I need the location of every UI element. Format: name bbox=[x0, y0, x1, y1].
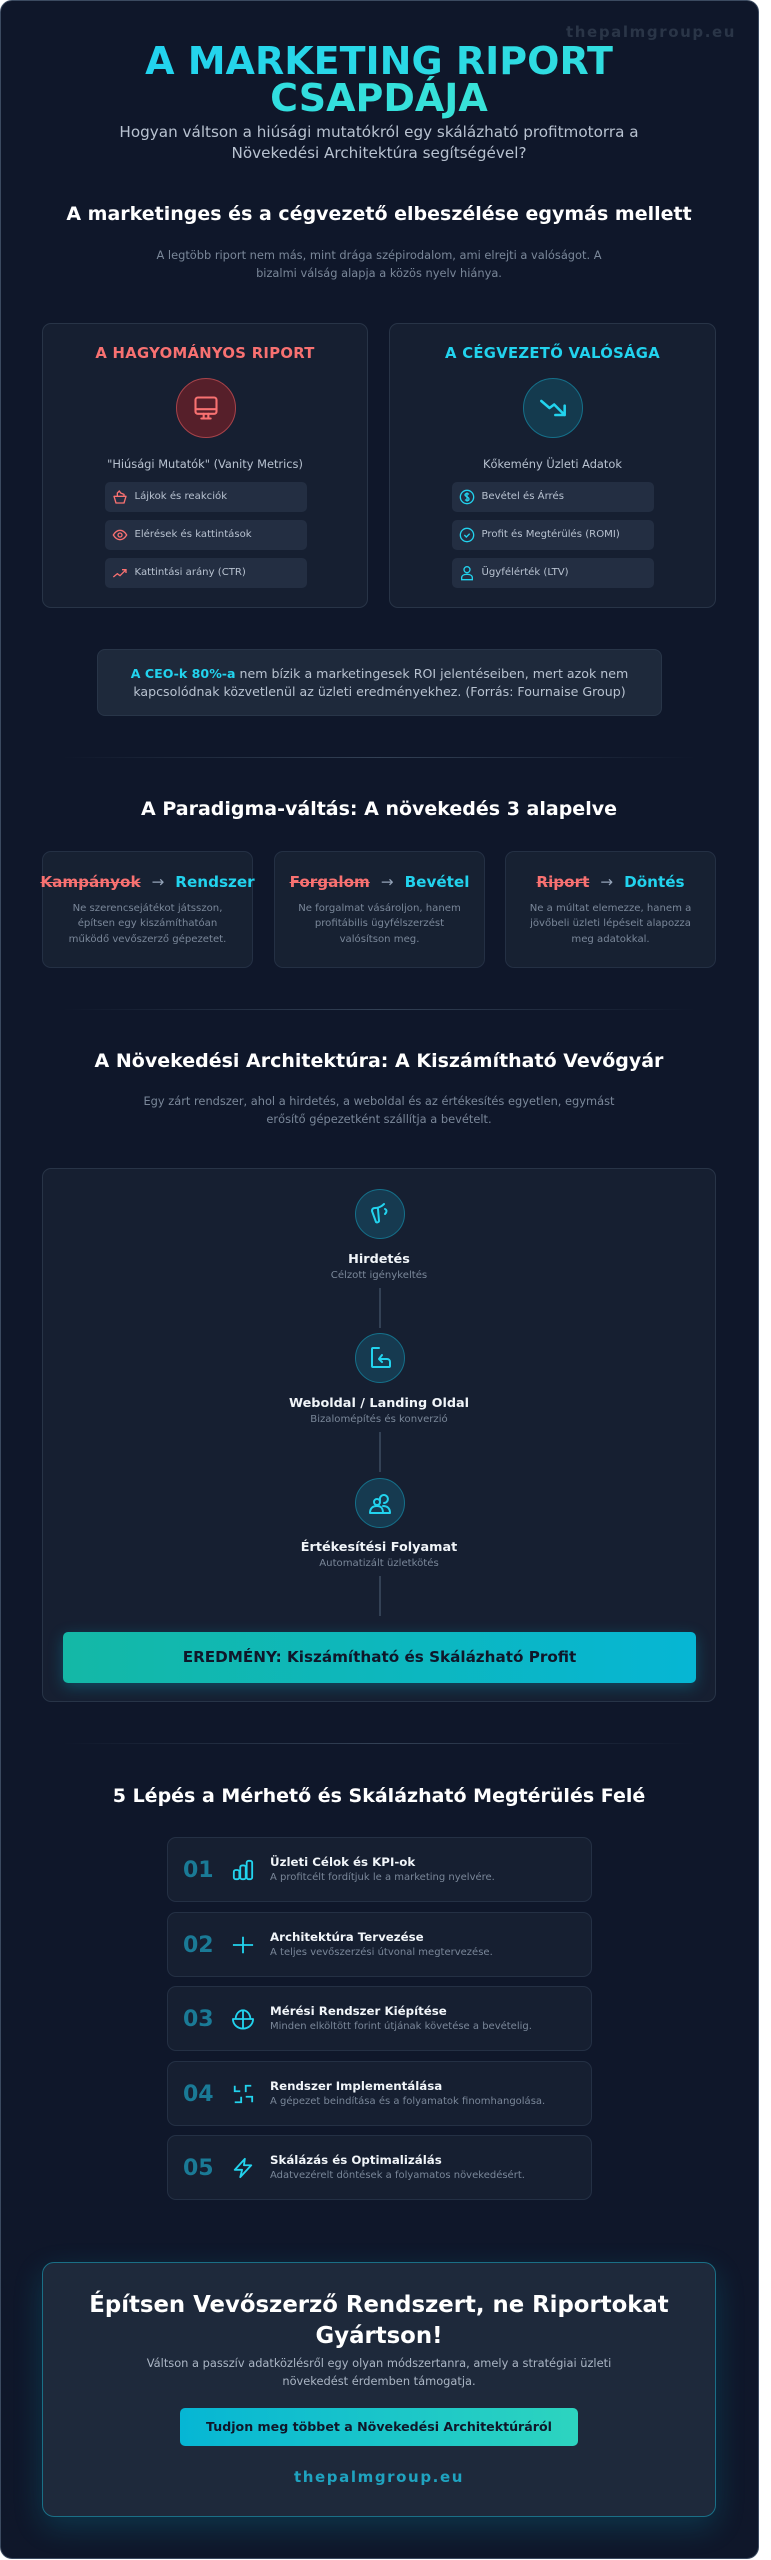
icon: sales team bbox=[355, 1478, 405, 1528]
step 04 bbox=[167, 2061, 592, 2126]
icon: corner brackets bbox=[234, 2084, 254, 2104]
architecture intro: erősítő gépezetként szállítja a bevételt. bbox=[266, 1112, 492, 1126]
metric: ctr bbox=[105, 558, 307, 588]
card: campaigns to system bbox=[42, 851, 253, 968]
shift headline: Kampányok bbox=[40, 873, 141, 891]
metric: revenue: Bevétel és Árrés bbox=[482, 491, 564, 502]
card text bbox=[69, 903, 226, 945]
metric: ltv: Ügyfélérték (LTV) bbox=[482, 567, 569, 578]
metric: ltv bbox=[452, 558, 654, 588]
card: traffic to revenue bbox=[274, 851, 485, 968]
heading: growth architecture: A Növekedési Architektúra: A Kiszámítható Vevőgyár bbox=[95, 1050, 663, 1072]
step number: 03 bbox=[183, 2007, 214, 2032]
icon: megaphone bbox=[355, 1189, 405, 1239]
card: report to decision bbox=[505, 851, 716, 968]
title: CSAPDÁJA bbox=[270, 76, 488, 120]
step 02 bbox=[167, 1912, 592, 1977]
callout text: kapcsolódnak közvetlenül az üzleti eredményekhez. (Forrás: Fournaise Group) bbox=[133, 684, 626, 699]
step text: A profitcélt fordítjuk le a marketing nyelvére. bbox=[270, 1872, 495, 1882]
metric: profit: Profit és Megtérülés (ROMI) bbox=[482, 529, 620, 540]
metric: reach: Elérések és kattintások bbox=[134, 529, 252, 540]
step title: Skálázás és Optimalizálás bbox=[270, 2153, 442, 2167]
heading: five steps: 5 Lépés a Mérhető és Skálázható Megtérülés Felé bbox=[113, 1785, 645, 1807]
icon: bars bbox=[232, 1860, 254, 1880]
icon: landing page bbox=[355, 1333, 405, 1383]
step: website: Weboldal / Landing Oldal bbox=[289, 1396, 469, 1411]
watermark: thepalmgroup.eu bbox=[566, 23, 736, 41]
callout text bbox=[130, 666, 628, 699]
cta heading: Gyártson! bbox=[316, 2323, 442, 2349]
card text: működő vevőszerző gépezetet. bbox=[69, 934, 226, 945]
shift headline bbox=[290, 873, 469, 891]
step 03 bbox=[167, 1986, 592, 2051]
label: "Hiúsági Mutatók" (Vanity Metrics) bbox=[107, 457, 303, 471]
heading: narratives: A marketinges és a cégvezető elbeszélése egymás mellett bbox=[66, 203, 692, 225]
shift headline: → bbox=[152, 873, 164, 891]
panel title: A CÉGVEZETŐ VALÓSÁGA bbox=[445, 345, 660, 362]
card text: meg adatokkal. bbox=[571, 934, 650, 945]
card text bbox=[530, 903, 691, 945]
cta button: Tudjon meg többet a Növekedési Architektúráról bbox=[206, 2419, 552, 2434]
panel: call to action bbox=[42, 2262, 716, 2517]
metric: revenue bbox=[452, 482, 654, 512]
architecture intro: Egy zárt rendszer, ahol a hirdetés, a weboldal és az értékesítés egyetlen, egymást bbox=[143, 1094, 615, 1108]
step text: Minden elköltött forint útjának követése a bevételig. bbox=[270, 2020, 532, 2032]
icon: bolt bbox=[234, 2158, 252, 2178]
metric: likes: Lájkok és reakciók bbox=[134, 491, 227, 502]
card text: építsen egy kiszámíthatóan bbox=[78, 918, 217, 929]
cta heading bbox=[89, 2290, 669, 2349]
intro text: bizalmi válság alapja a közös nyelv hiánya. bbox=[256, 266, 502, 280]
step: advertising: Hirdetés bbox=[348, 1252, 410, 1267]
shift headline: Bevétel bbox=[405, 873, 469, 891]
step caption: Bizalomépítés és konverzió bbox=[310, 1414, 448, 1425]
step title: Üzleti Célok és KPI-ok bbox=[270, 1855, 415, 1869]
shift headline bbox=[536, 873, 685, 891]
step title: Mérési Rendszer Kiépítése bbox=[270, 2004, 447, 2018]
step number: 04 bbox=[183, 2082, 214, 2107]
result bar: EREDMÉNY: Kiszámítható és Skálázható Profit bbox=[183, 1648, 576, 1666]
callout text: A CEO-k 80%-a nem bízik a marketingesek ROI jelentéseiben, mert azok nem bbox=[131, 666, 628, 681]
cta text bbox=[146, 2356, 611, 2388]
card text: Ne forgalmat vásároljon, hanem bbox=[298, 903, 461, 914]
cta text: Váltson a passzív adatközlésről egy olyan módszertanra, amely a stratégiai üzleti bbox=[147, 2356, 611, 2370]
cta button bbox=[180, 2408, 578, 2446]
icon: monitor bbox=[176, 378, 236, 438]
intro text: A legtöbb riport nem más, mint drága szépirodalom, ami elrejti a valóságot. A bbox=[156, 248, 602, 262]
callout: CEO statistic bbox=[97, 649, 662, 716]
step caption: Automatizált üzletkötés bbox=[319, 1558, 439, 1569]
shift headline: Döntés bbox=[624, 873, 685, 891]
heading: paradigm shift: A Paradigma-váltás: A növekedés 3 alapelve bbox=[141, 798, 617, 820]
shift headline: → bbox=[600, 873, 613, 891]
subtitle bbox=[119, 123, 639, 162]
step title: Architektúra Tervezése bbox=[270, 1930, 424, 1944]
shift headline bbox=[40, 873, 255, 891]
step 05 bbox=[167, 2135, 592, 2200]
title bbox=[145, 39, 613, 120]
icon: pie bbox=[232, 2009, 254, 2030]
panel: traditional report bbox=[42, 323, 368, 608]
shift headline: Rendszer bbox=[175, 873, 255, 891]
metric: ctr: Kattintási arány (CTR) bbox=[134, 567, 246, 578]
icon: chart down bbox=[523, 378, 583, 438]
architecture intro bbox=[143, 1094, 615, 1126]
brand link: thepalmgroup.eu bbox=[294, 2468, 464, 2486]
card text: valósítson meg. bbox=[340, 934, 419, 945]
card text: Ne szerencsejátékot játsszon, bbox=[73, 903, 222, 914]
card text: profitábilis ügyfélszerzést bbox=[315, 918, 444, 929]
step title: Rendszer Implementálása bbox=[270, 2079, 442, 2093]
metric: likes bbox=[105, 482, 307, 512]
step caption: Célzott igénykeltés bbox=[331, 1270, 427, 1281]
panel: flow diagram bbox=[42, 1168, 716, 1702]
step 01 bbox=[167, 1837, 592, 1902]
shift headline: → bbox=[381, 873, 394, 891]
cta text: növekedést érdemben támogatja. bbox=[282, 2374, 476, 2388]
metric: profit bbox=[452, 520, 654, 550]
step text: A teljes vevőszerzési útvonal megtervezése. bbox=[270, 1946, 493, 1958]
step number: 02 bbox=[183, 1933, 214, 1958]
subtitle: Hogyan váltson a hiúsági mutatókról egy skálázható profitmotorra a bbox=[119, 123, 639, 141]
step text: Adatvezérelt döntések a folyamatos növekedésért. bbox=[270, 2170, 525, 2180]
intro text bbox=[156, 248, 602, 280]
step number: 05 bbox=[183, 2156, 214, 2181]
step number: 01 bbox=[183, 1858, 214, 1883]
icon: plus bbox=[232, 1936, 254, 1954]
title: A MARKETING RIPORT bbox=[145, 39, 613, 83]
card text: jövőbeli üzleti lépéseit alapozza bbox=[530, 918, 691, 929]
panel: CEO reality bbox=[389, 323, 716, 608]
shift headline: Forgalom bbox=[290, 873, 370, 891]
cta heading: Építsen Vevőszerző Rendszert, ne Riportokat bbox=[89, 2292, 669, 2318]
shift headline: Riport bbox=[536, 873, 589, 891]
metric: reach bbox=[105, 520, 307, 550]
result bar bbox=[63, 1632, 696, 1683]
card text: Ne a múltat elemezze, hanem a bbox=[530, 903, 691, 914]
label: Kőkemény Üzleti Adatok bbox=[483, 457, 622, 471]
step text: A gépezet beindítása és a folyamatok finomhangolása. bbox=[270, 2096, 545, 2106]
step: sales process: Értékesítési Folyamat bbox=[301, 1540, 457, 1555]
panel title: A HAGYOMÁNYOS RIPORT bbox=[95, 345, 315, 362]
card text bbox=[298, 903, 461, 945]
subtitle: Növekedési Architektúra segítségével? bbox=[232, 144, 526, 162]
